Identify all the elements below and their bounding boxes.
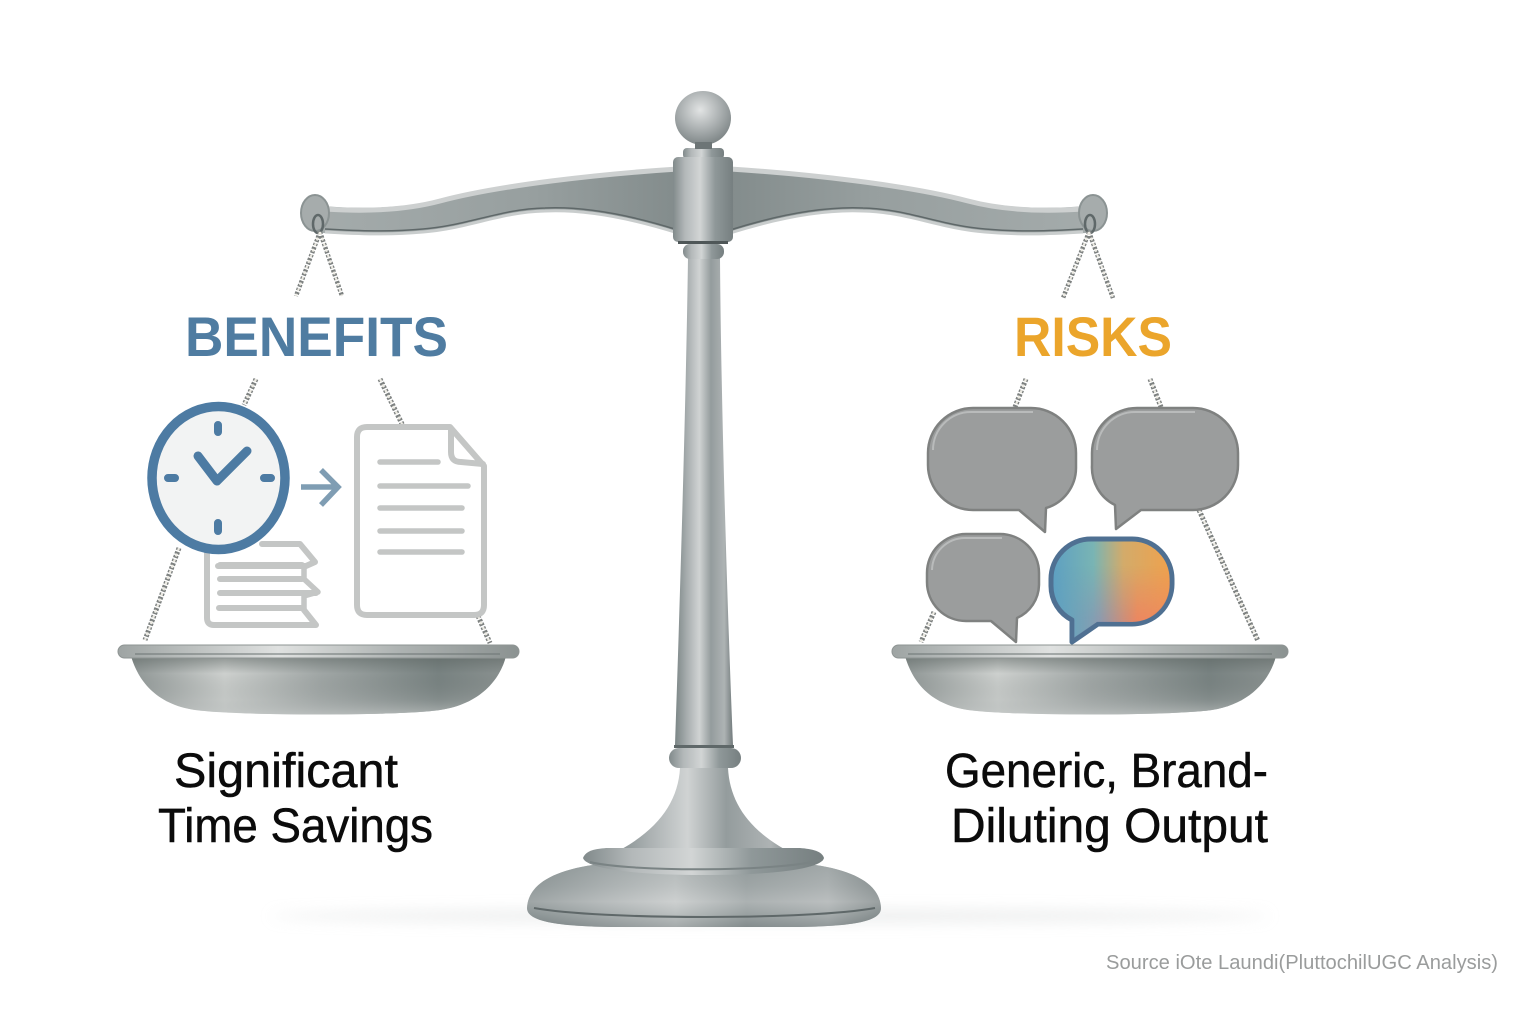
- lower chains: [145, 379, 1258, 643]
- speech bubble: grey top right: [1092, 408, 1238, 529]
- heading: benefits: BENEFITS: [185, 305, 448, 368]
- upper chains: [296, 232, 1113, 298]
- scale stand: pole and base: [527, 258, 881, 927]
- arrow: time to document: [301, 470, 338, 505]
- center hub: [673, 148, 733, 259]
- icon: clock: [152, 406, 285, 550]
- ground shadow: [270, 909, 1270, 923]
- speech bubble: colorful gradient: [1051, 539, 1172, 642]
- label: significant time savings: Time Savings: [158, 800, 433, 853]
- label: generic brand-diluting output: Diluting Output: [951, 800, 1268, 853]
- icon: stack of pages: [207, 544, 318, 625]
- finial ball: [675, 91, 731, 149]
- clock hands: [198, 451, 247, 481]
- right arm: [730, 167, 1107, 235]
- speech bubble: grey bottom left: [927, 534, 1039, 642]
- label: significant time savings: [158, 745, 433, 853]
- clock ticks: [168, 425, 271, 531]
- speech bubble: grey top left: [928, 408, 1076, 532]
- left arm: [301, 167, 678, 235]
- label: generic brand-diluting output: Generic, Brand-: [945, 745, 1268, 798]
- label: generic brand-diluting output: [945, 745, 1268, 853]
- scale beam: [301, 91, 1107, 259]
- infographic: balance scale of benefits and risks: [118, 91, 1497, 973]
- left pan: [118, 645, 519, 714]
- heading: risks: RISKS: [1014, 305, 1172, 368]
- right pan: [892, 645, 1288, 714]
- source note: Source iOte Laundi(PluttochilUGC Analysis): [1106, 952, 1498, 974]
- icon: document: [357, 427, 484, 615]
- label: significant time savings: Significant: [174, 745, 398, 798]
